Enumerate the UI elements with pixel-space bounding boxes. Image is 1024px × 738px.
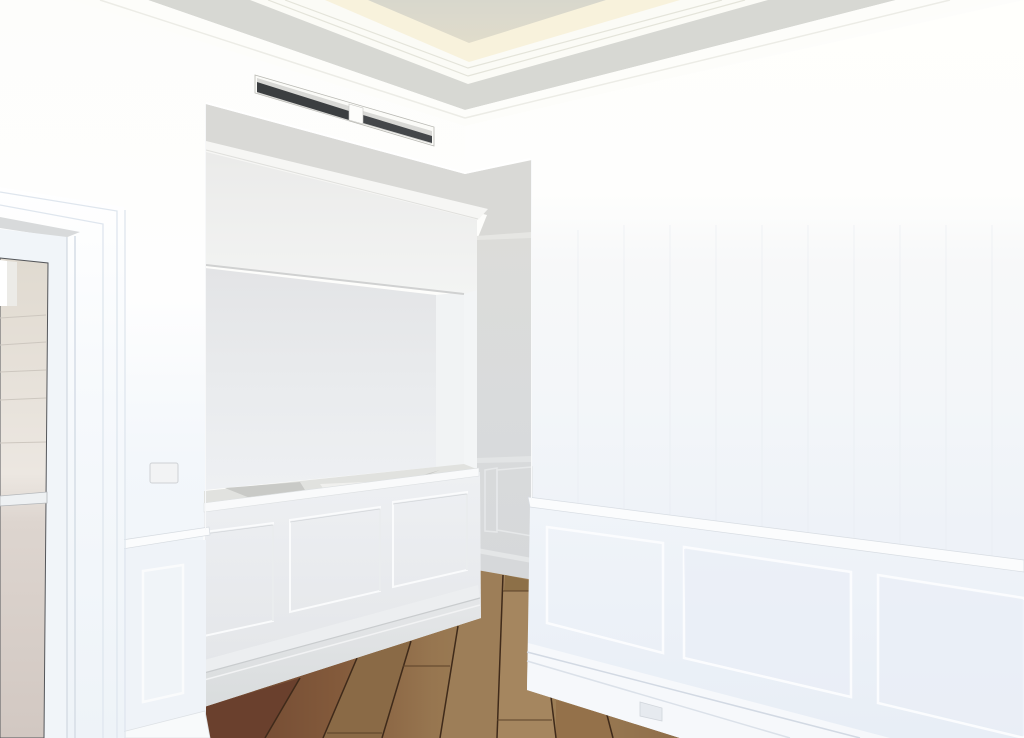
pier edge xyxy=(204,104,206,530)
alcove recess xyxy=(205,268,436,490)
corridor beyond xyxy=(477,232,532,580)
alcove countertop xyxy=(204,464,479,505)
left pier wainscot xyxy=(122,527,210,738)
left wall xyxy=(0,0,465,738)
door glass xyxy=(0,258,48,738)
door xyxy=(0,229,67,738)
door head shadow xyxy=(0,217,80,238)
alcove wainscot cabinet xyxy=(204,468,481,707)
alcove right pier xyxy=(464,210,477,472)
air vent xyxy=(255,75,434,146)
door frame xyxy=(0,187,125,738)
tongue and groove lines xyxy=(578,225,992,558)
soffit edge trim xyxy=(206,103,530,173)
wood floor xyxy=(205,570,680,738)
crown moulding: right xyxy=(465,0,1000,126)
crown moulding: inner ceiling xyxy=(268,0,745,76)
right wall xyxy=(465,0,1024,738)
alcove return xyxy=(436,292,464,467)
light switch xyxy=(150,463,178,483)
alcove upper bulkhead xyxy=(206,141,488,294)
right wall wainscot xyxy=(527,497,1024,738)
ceiling xyxy=(148,0,896,110)
soffit above alcove xyxy=(206,104,532,240)
right wall corner edge xyxy=(530,160,532,500)
power outlet xyxy=(640,702,662,721)
crown moulding: left xyxy=(72,0,465,126)
